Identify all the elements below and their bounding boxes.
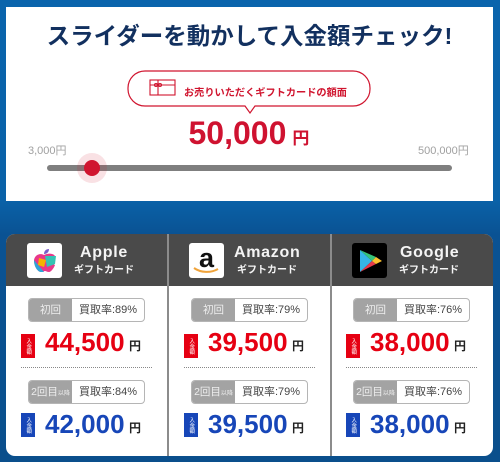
rate: repeat purchase: 買取率:79% [242,386,300,398]
rate: first purchase: 初回 [203,304,224,316]
subheading: ギフトカード [237,265,297,276]
yen: 円 [454,339,466,353]
badge: 入金額 [25,417,31,433]
column: Amazon [184,243,315,439]
badge: 入金額 [350,338,356,354]
rate: first purchase: 買取率:76% [404,304,462,316]
subheading: ギフトカード [399,265,459,276]
heading: Apple: Apple [80,244,128,261]
rate: repeat purchase: 2回目以降 [356,386,395,398]
badge: 入金額 [188,417,194,433]
rate: first purchase: 初回 [365,304,386,316]
yen: 円 [454,421,466,435]
amount: first: 38,000 [370,327,450,357]
rate: first purchase: 買取率:79% [242,304,300,316]
amount: repeat: 38,000 [370,409,450,439]
amount: first: 39,500 [208,327,288,357]
badge: 入金額 [350,417,356,433]
badge [346,413,360,437]
panel: comparison table [6,234,493,456]
badge [21,334,35,358]
rate: first purchase: 買取率:89% [79,304,137,316]
icon: Amazon gift card: a [199,243,215,273]
column divider [330,234,332,456]
icon: Apple gift card [27,243,62,278]
heading: Google: Google [400,244,459,261]
amount: repeat: 42,000 [45,409,125,439]
rate: repeat purchase: 買取率:84% [79,386,137,398]
rate: repeat purchase [28,380,145,404]
yen: 円 [129,339,141,353]
badge [184,334,198,358]
rate: first purchase [28,298,145,322]
badge [346,334,360,358]
column divider [167,234,168,456]
callout: card face value [127,70,371,114]
yen: 円 [129,421,141,435]
rate: repeat purchase [353,380,470,404]
icon: Amazon gift card [189,243,224,278]
callout: card face value: お売りいただくギフトカードの額面 [184,86,347,99]
column: Google [346,243,477,439]
rate: first purchase [353,298,470,322]
rate: repeat purchase [191,380,308,404]
badge: 入金額 [25,338,31,354]
slider amount: 50,000 円 [188,115,309,151]
slider track [47,165,452,171]
rate: repeat purchase: 2回目以降 [194,386,233,398]
badge [21,413,35,437]
rate: repeat purchase: 買取率:76% [404,386,462,398]
subheading: ギフトカード [74,265,134,276]
title: スライダーを動かして入金額チェック! [47,23,452,49]
icon: Google Play gift card [352,243,387,278]
yen: 円 [292,339,304,353]
slider maximum label: 500,000円 [418,145,469,157]
slider handle [77,153,107,183]
badge: 入金額 [188,338,194,354]
rate: first purchase [191,298,308,322]
amount: first: 44,500 [45,327,125,357]
amount: repeat: 39,500 [208,409,288,439]
rate: repeat purchase: 2回目以降 [31,386,70,398]
heading: Amazon: Amazon [234,244,300,261]
yen: 円 [292,421,304,435]
header bar [6,234,493,286]
rate: first purchase: 初回 [40,304,61,316]
slider minimum label: 3,000円 [28,145,67,157]
panel: slider [6,7,493,201]
badge [184,413,198,437]
